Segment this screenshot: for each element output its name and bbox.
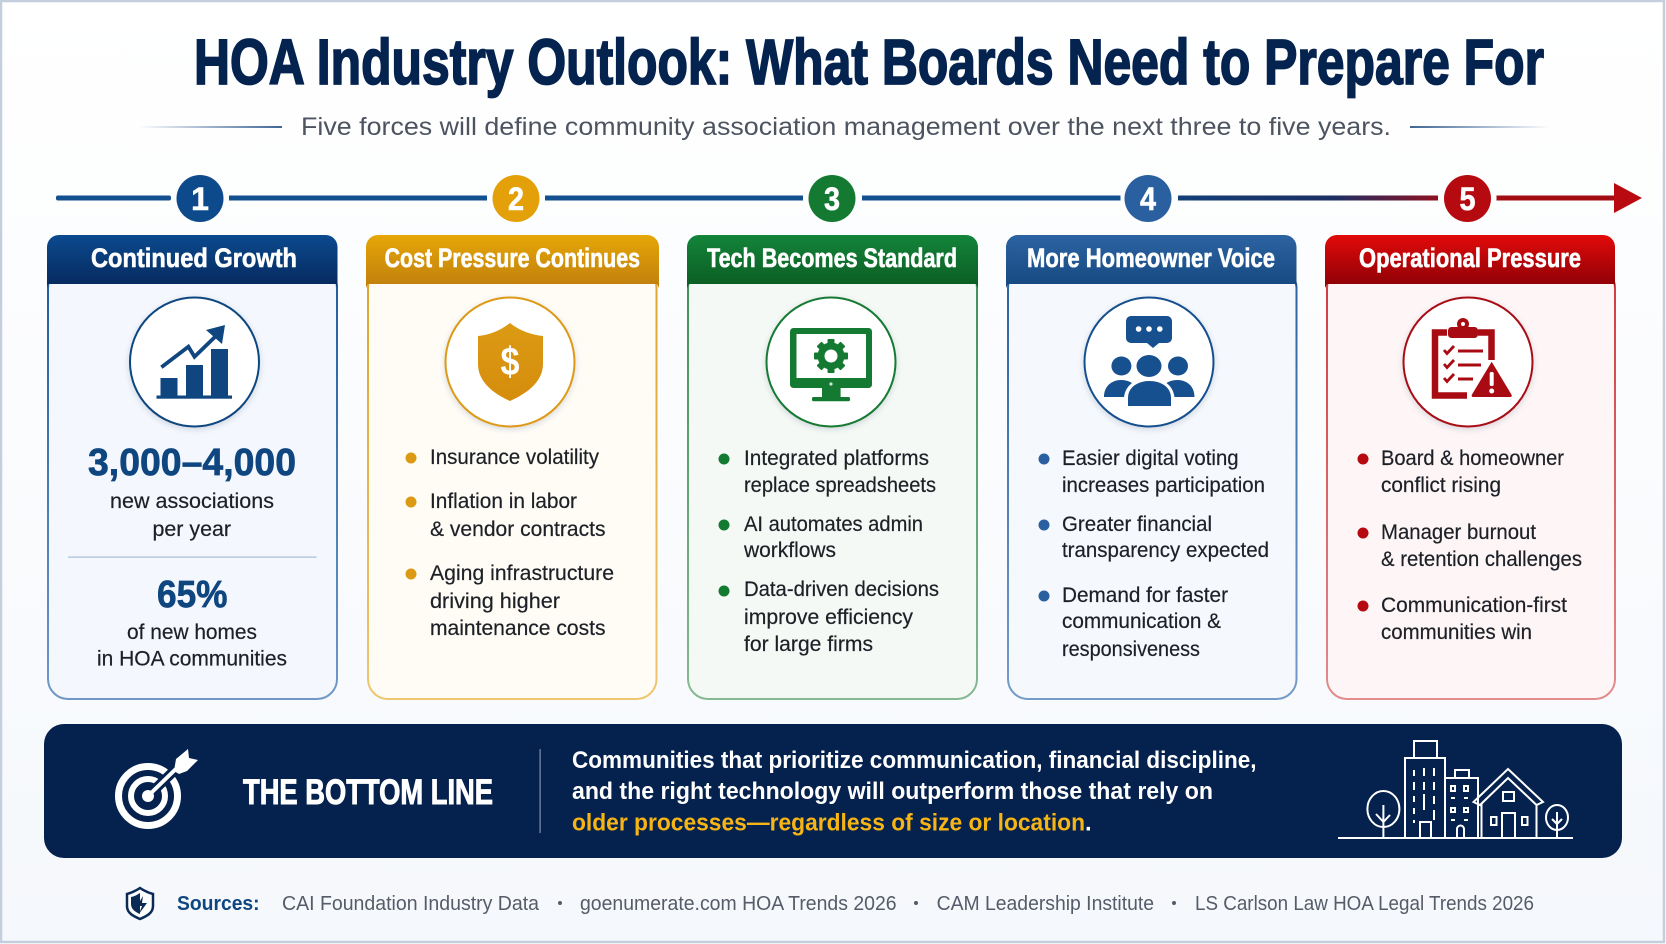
heading: THE BOTTOM LINE — [243, 773, 493, 812]
bullet: conflict: conflict rising — [1381, 474, 1501, 497]
stat label: new associations — [110, 490, 274, 513]
bullet: data-driven — [718, 578, 939, 656]
bullet: communication — [1038, 584, 1228, 661]
bullet: data-driven: Data-driven decisions — [744, 578, 939, 601]
message text: . — [1085, 810, 1092, 836]
icon: clipboard with warning — [1404, 298, 1532, 426]
arrow head — [1614, 183, 1642, 213]
step 4 — [1124, 175, 1172, 222]
heading: More Homeowner Voice — [1027, 243, 1275, 273]
bullet: integrated platforms: replace spreadsheets — [744, 474, 936, 497]
bullet: data-driven: improve efficiency — [744, 606, 913, 629]
sources footer — [127, 888, 1534, 919]
message text: and the right technology will outperform those that rely on — [572, 778, 1213, 805]
panel: operational pressure — [1325, 235, 1615, 699]
step 4: 4 — [1140, 181, 1156, 217]
bullet: transparency — [1038, 513, 1269, 562]
message text — [572, 747, 1256, 836]
icon: dollar shield: $ — [500, 340, 520, 384]
icon: monitor with gear — [766, 298, 896, 426]
bullet: conflict — [1358, 447, 1564, 497]
source list — [282, 893, 1534, 915]
step 5: 5 — [1460, 181, 1476, 217]
icon: shield — [127, 888, 153, 919]
bullet: voting: Easier digital voting — [1062, 447, 1239, 470]
bullet: transparency: transparency expected — [1062, 539, 1269, 562]
bullet: aging infrastructure: driving higher — [430, 590, 560, 613]
step 5 — [1444, 175, 1491, 222]
source list: goenumerate.com HOA Trends 2026 — [580, 893, 897, 915]
panel: homeowner voice — [1006, 235, 1296, 699]
bullet: conflict: Board & homeowner — [1381, 447, 1564, 470]
heading: Cost Pressure Continues — [385, 243, 640, 273]
stat label: per year — [152, 518, 231, 541]
icon: people with speech bubble — [1084, 298, 1214, 426]
bullet: transparency: Greater financial — [1062, 513, 1212, 536]
bullet: voting — [1038, 447, 1265, 497]
step 3 — [808, 175, 856, 222]
bullet: communication-first: Communication-first — [1381, 594, 1567, 617]
source list: LS Carlson Law HOA Legal Trends 2026 — [1195, 893, 1534, 915]
icon: target with arrow — [118, 749, 198, 826]
bullet: communication: responsiveness — [1062, 638, 1200, 661]
icon: dollar shield — [446, 298, 574, 426]
bullet: aging infrastructure: maintenance costs — [430, 617, 606, 640]
bullet: AI: workflows — [743, 539, 836, 562]
bullet: burnout: & retention challenges — [1381, 548, 1582, 571]
sources label: Sources: — [177, 893, 260, 915]
timeline — [56, 175, 1642, 222]
bullet: communication: communication & — [1062, 610, 1221, 633]
bullet: integrated platforms: Integrated platforms — [744, 447, 929, 470]
bullet: integrated platforms — [718, 447, 936, 497]
bullet: burnout: Manager burnout — [1381, 521, 1536, 544]
source list: CAM Leadership Institute — [937, 893, 1154, 915]
bullet: burnout — [1358, 521, 1582, 571]
source list: CAI Foundation Industry Data — [282, 893, 540, 915]
message text: older processes—regardless of size or location — [572, 810, 1085, 836]
step 1: 1 — [191, 181, 209, 217]
icon: city skyline — [1338, 741, 1573, 838]
bullet: inflation — [406, 490, 606, 541]
step 2 — [492, 175, 540, 222]
icon: growth chart — [130, 298, 259, 426]
heading: Operational Pressure — [1359, 243, 1581, 273]
stat label — [97, 621, 287, 670]
bullet: inflation: & vendor contracts — [430, 518, 606, 541]
stat label — [110, 490, 274, 541]
bullet: aging infrastructure — [406, 562, 614, 640]
bullet: voting: increases participation — [1062, 474, 1265, 497]
bullet: communication-first — [1358, 594, 1567, 644]
bullet: communication: Demand for faster — [1062, 584, 1228, 607]
subtitle with rules: Five forces will define community association management over the next three to five years. — [301, 113, 1391, 141]
panel: continued growth — [47, 235, 338, 699]
bullet: insurance: Insurance volatility — [430, 446, 599, 469]
stat: new associations: 3,000–4,000 — [88, 442, 296, 484]
bullet: inflation: Inflation in labor — [430, 490, 577, 513]
stat label: in HOA communities — [97, 648, 287, 670]
step 1 — [176, 175, 224, 222]
bullet: AI: AI automates admin — [744, 513, 923, 536]
stat label: of new homes — [127, 621, 257, 644]
bullet: aging infrastructure: Aging infrastructure — [430, 562, 614, 585]
panel: tech standard — [687, 235, 978, 699]
bullet: communication-first: communities win — [1381, 621, 1532, 644]
bullet: data-driven: for large firms — [744, 633, 873, 656]
heading: Continued Growth — [91, 243, 297, 273]
heading: Tech Becomes Standard — [707, 243, 957, 273]
stat: share of homes: 65% — [157, 574, 228, 616]
panel: bottom line banner — [44, 724, 1622, 858]
message text: Communities that prioritize communication, financial discipline, — [572, 747, 1256, 774]
panel: cost pressure — [366, 235, 659, 699]
step 2: 2 — [508, 181, 524, 217]
bullet: AI — [718, 513, 923, 562]
step 3: 3 — [824, 181, 840, 217]
